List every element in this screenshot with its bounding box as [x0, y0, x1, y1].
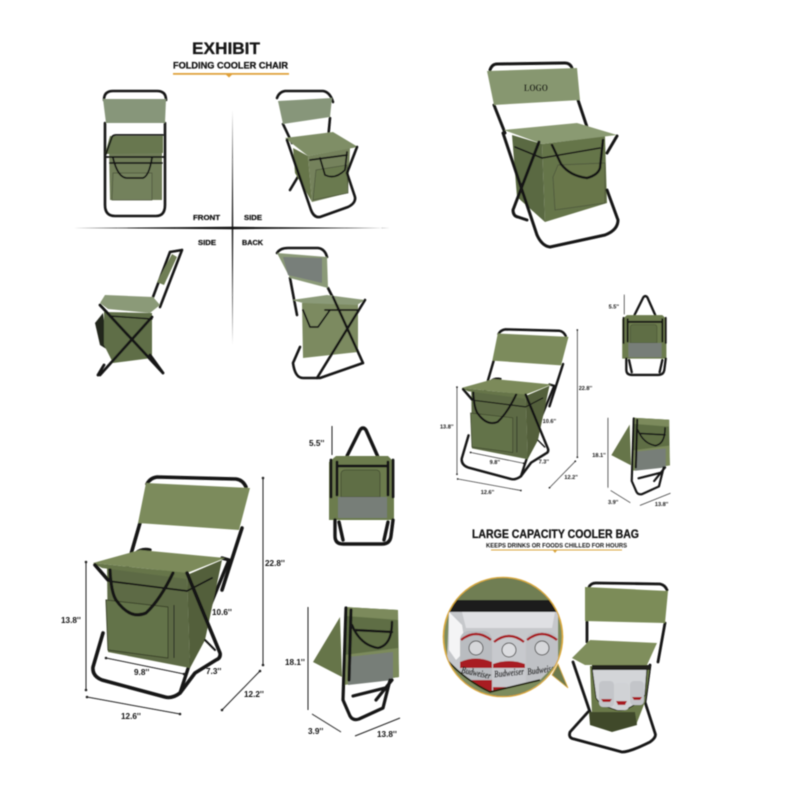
quadrant divider cross [73, 110, 390, 345]
dimension diagram: folded side: 3.9'' [308, 727, 323, 736]
small folded front view: 5.5'' [609, 304, 620, 310]
subtitle: FOLDING COOLER CHAIR [173, 60, 288, 72]
large chair dimension labels: 12.2'' [244, 690, 264, 699]
small folded side view [592, 418, 670, 508]
dimension diagram: folded side: 13.8'' [377, 730, 397, 739]
callout pointer [552, 664, 568, 688]
small chair measurement lines [456, 329, 578, 491]
small chair dimension labels: 12.6'' [481, 490, 495, 496]
heading: cooler bag [472, 529, 639, 550]
chair: side profile view [95, 250, 182, 375]
small chair dimension labels: 13.8'' [440, 425, 454, 431]
can right: Budweiser [526, 663, 558, 678]
callout: magnified cooler interior [440, 575, 570, 700]
view labels [193, 213, 264, 247]
large chair illustration [93, 477, 250, 698]
small folded front view [609, 295, 666, 375]
dimension diagram: folded front [309, 426, 394, 544]
title: exhibit heading: EXHIBIT [192, 40, 260, 58]
dimension diagram: folded side: 18.1'' [285, 658, 305, 667]
large chair dimension labels: 10.6'' [212, 608, 232, 617]
measurement lines [85, 477, 264, 715]
small chair dimension labels: 10.6'' [543, 419, 557, 425]
chair: front view [103, 91, 166, 216]
small chair dimension labels: 22.8'' [579, 386, 593, 392]
small chair dimension labels: 9.8'' [490, 460, 501, 466]
view labels: FRONT [193, 213, 221, 222]
large chair dimension labels: 13.8'' [61, 616, 81, 625]
heading: cooler bag: LARGE CAPACITY COOLER BAG [472, 529, 639, 541]
title: exhibit heading [173, 40, 288, 72]
large chair dimension labels: 9.8'' [134, 668, 149, 677]
logo text: LOGO [524, 83, 548, 93]
small chair dimension labels [440, 386, 593, 496]
large chair dimension labels: 22.8'' [265, 559, 285, 568]
view labels: BACK [242, 238, 264, 247]
chair with open cooler bag [570, 583, 668, 752]
dimension diagram: large chair [61, 477, 285, 721]
small folded side view: 13.8'' [655, 502, 669, 508]
small chair dimension labels: 12.2'' [564, 475, 579, 481]
large chair dimension labels: 7.3'' [206, 667, 221, 676]
small dimension diagram [440, 329, 593, 496]
subheading: KEEPS DRINKS OR FOODS CHILLED FOR HOURS [486, 542, 628, 550]
small chair illustration [462, 329, 568, 479]
view labels: SIDE [244, 213, 262, 222]
chair with logo [487, 63, 618, 247]
dimension diagram: folded front: 5.5'' [309, 439, 324, 448]
small folded side view: 3.9'' [608, 500, 619, 506]
cooler heading underline [491, 550, 622, 553]
chair: three-quarter side view [277, 91, 358, 217]
chair: back view [277, 248, 365, 378]
dimension diagram: folded side [285, 607, 400, 739]
small folded side view: 18.1'' [592, 453, 606, 459]
can left: Budweiser [459, 665, 492, 682]
heading underline with marker [173, 73, 289, 78]
small chair dimension labels: 7.3'' [539, 459, 550, 465]
small cans [599, 681, 644, 710]
large chair dimension labels [61, 559, 285, 721]
view labels: SIDE [198, 238, 216, 247]
large chair dimension labels: 12.6'' [121, 712, 141, 721]
can middle: Budweiser [493, 666, 525, 681]
